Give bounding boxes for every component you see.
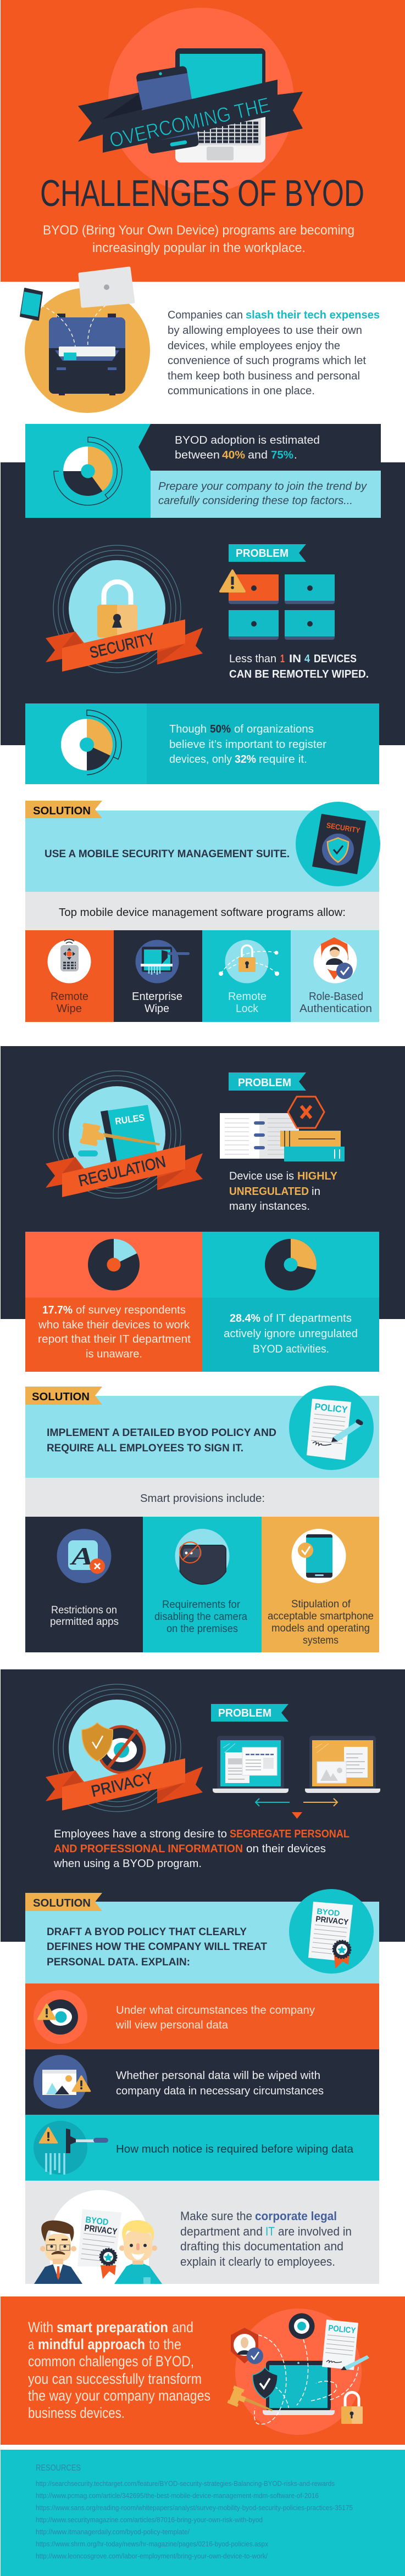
icon: eye warning	[34, 1990, 87, 2044]
icon: shield	[82, 1723, 113, 1761]
solution tag	[25, 1893, 102, 1911]
icon: shield	[253, 2367, 278, 2399]
survey text: report that their IT department	[38, 1333, 191, 1345]
conclusion text: business devices.	[28, 2405, 125, 2421]
feature: remote wipe	[25, 930, 114, 1022]
text block: segregate: SEGREGATE PERSONAL	[230, 1828, 349, 1840]
icon: personal laptop	[305, 1736, 380, 1793]
provision: permitted apps	[25, 1517, 143, 1652]
solution tag: SOLUTION	[33, 805, 91, 817]
IT department text	[224, 1312, 358, 1355]
text: legal and IT	[180, 2209, 352, 2268]
header circle	[108, 8, 294, 193]
text block: segregate: Employees have a strong desire to	[54, 1828, 227, 1840]
row text: will view personal data	[115, 2019, 229, 2031]
solution tag	[25, 1387, 102, 1405]
survey text: of survey respondents	[76, 1304, 186, 1316]
feature: role-based authentication: Authentication	[299, 1003, 372, 1015]
icon: security book: SECURITY	[326, 821, 360, 835]
panel: smart provisions	[25, 1478, 379, 1652]
conclusion text: and	[172, 2319, 193, 2335]
row text	[116, 2069, 324, 2097]
icon: padlock	[97, 582, 137, 638]
text block: segregate: AND PROFESSIONAL INFORMATION	[54, 1842, 243, 1855]
illustration: BYOD challenges converge on laptop	[227, 2309, 369, 2435]
text block: remote wipe problem: CAN BE REMOTELY WIPED.	[229, 668, 369, 680]
resources links: https://www.sans.org/reading-room/whitepapers/analyst/survey-mobility-byod-security-policies-practices-35175	[36, 2504, 353, 2512]
icon: device grid	[220, 571, 335, 640]
icon: squeegee warning	[34, 2121, 108, 2175]
IT department text: of IT departments	[263, 1312, 352, 1325]
feature: remote wipe: Wipe	[57, 1003, 82, 1015]
IT department text: 28.4%	[230, 1312, 260, 1325]
prompt text: carefully considering these top factors...	[158, 495, 353, 507]
solution tag	[25, 801, 102, 818]
provisions heading: Smart provisions include:	[140, 1493, 265, 1505]
illustration: two employees with policy: BYOD	[85, 2215, 109, 2227]
icon: policy: POLICY	[328, 2323, 356, 2335]
registration text: require it.	[259, 753, 307, 765]
feature: enterprise wipe: Enterprise	[132, 991, 182, 1003]
resources heading: RESOURCES	[36, 2463, 81, 2473]
icon: privacy certificate: BYOD	[317, 1907, 340, 1918]
icon: user hexagon	[231, 2328, 263, 2364]
feature: enterprise wipe	[114, 930, 202, 1022]
provision: smartphone models: acceptable smartphone	[268, 1611, 374, 1622]
chart: 28.4 percent pie	[265, 1239, 317, 1290]
feature: enterprise wipe: Wipe	[145, 1003, 169, 1015]
provision: smartphone models: Stipulation of	[291, 1599, 351, 1610]
feature: remote wipe: Remote	[51, 991, 88, 1003]
text block: unregulated: UNREGULATED	[229, 1185, 309, 1198]
icon: image warning	[34, 2055, 90, 2109]
panel: privacy section background	[1, 1669, 405, 1942]
text block: remote wipe problem: DEVICES	[314, 652, 357, 665]
feature: role-based authentication: Role-Based	[309, 991, 363, 1003]
resources links: http://searchsecurity.techtarget.com/feature/BYOD-security-strategies-Balancing-BYOD-risks-and-rewards	[36, 2480, 335, 2488]
panel: device registration stat	[25, 703, 379, 784]
registration text	[169, 723, 326, 765]
person: employee	[114, 2220, 162, 2284]
icon: eye	[289, 2313, 314, 2339]
row: wipe personal data	[25, 2049, 379, 2115]
row: view personal data	[25, 1983, 379, 2049]
solution text: DRAFT A BYOD POLICY THAT CLEARLY	[47, 1926, 247, 1938]
title ribbon	[103, 80, 278, 153]
conclusion text: smart preparation	[57, 2319, 168, 2335]
adoption text	[175, 434, 320, 461]
solution text: USE A MOBILE SECURITY MANAGEMENT SUITE.	[45, 848, 290, 860]
provision: camera disabling	[143, 1517, 262, 1652]
resources links: https://www.shrm.org/hr-today/news/hr-magazine/pages/0216-byod-policies.aspx	[36, 2540, 269, 2548]
text block: tech expenses: communications in one place.	[168, 384, 315, 397]
icon: security book	[296, 802, 380, 886]
text block: unregulated: HIGHLY	[297, 1170, 337, 1182]
panel: survey stat	[25, 1232, 202, 1372]
solution text	[47, 1427, 276, 1454]
IT department text: actively ignore unregulated	[224, 1327, 358, 1340]
panel: regulation solution	[25, 1385, 379, 1478]
feature: remote lock: Remote	[228, 991, 267, 1003]
illustration: two employees with policy: PRIVACY	[84, 2223, 118, 2237]
panel: legal and IT	[25, 2181, 379, 2284]
registration text: Though	[169, 723, 207, 735]
header panel	[1, 0, 405, 282]
text block: tech expenses: devices, while employees enjoy the	[168, 339, 340, 352]
resources links: http://www.leoncosgrove.com/labor-employment/bring-your-own-device-to-work/	[36, 2552, 268, 2560]
text block: tech expenses: by allowing employees to use their own	[168, 324, 362, 337]
registration text: 32%	[235, 753, 256, 765]
text block: remote wipe problem: 1	[280, 652, 285, 665]
feature: remote lock: Lock	[236, 1003, 259, 1015]
ribbon tails	[78, 92, 303, 142]
resources links: http://www.pcmag.com/article/342695/the-best-mobile-device-management-mdm-software-of-2016	[36, 2492, 319, 2500]
registration text: of organizations	[234, 723, 314, 735]
text block: remote wipe problem: Less than	[229, 652, 276, 665]
provision: permitted apps: permitted apps	[50, 1616, 119, 1628]
conclusion text: With	[28, 2319, 53, 2335]
icon: gavel	[78, 1122, 160, 1156]
icon: policy	[322, 2320, 369, 2370]
icon: gavel	[227, 2385, 273, 2411]
text: legal and IT: drafting this documentation and	[180, 2239, 343, 2253]
text block: tech expenses: convenience of such programs which let	[168, 354, 366, 367]
privacy badge	[46, 1684, 203, 1812]
icon: binder and books	[220, 1097, 345, 1161]
panel: security section background	[1, 462, 405, 745]
regulation badge	[46, 1071, 203, 1198]
chart: registration donut	[61, 710, 121, 775]
adoption text: BYOD adoption is estimated	[175, 434, 320, 446]
text block: segregate: on their devices	[246, 1842, 326, 1855]
text: legal and IT: explain it clearly to employees.	[180, 2255, 335, 2268]
arrow: left teal	[256, 1798, 290, 1806]
provision: smartphone models: models and operating	[271, 1623, 370, 1634]
intro text: increasingly popular in the workplace.	[92, 241, 306, 255]
solution text	[47, 1926, 267, 1968]
row: notice before wiping	[25, 2115, 379, 2181]
text block: tech expenses: slash their tech expenses	[246, 309, 380, 321]
provision: permitted apps: Restrictions on	[51, 1605, 117, 1616]
text block: unregulated: in	[312, 1185, 320, 1198]
conclusion text	[28, 2319, 210, 2421]
provision: permitted apps: A	[69, 1542, 93, 1570]
chart: 17.7 percent pie	[88, 1239, 140, 1290]
panel: security solution	[25, 801, 380, 892]
text block: tech expenses: Companies can	[168, 309, 243, 321]
feature: remote lock	[202, 930, 291, 1022]
registration text: 50%	[210, 723, 231, 735]
security badge	[46, 545, 203, 673]
icon: privacy certificate: PRIVACY	[315, 1915, 349, 1927]
text block: unregulated: Device use is	[229, 1170, 294, 1182]
panel: resources	[1, 2450, 405, 2576]
problem tag: security	[229, 544, 306, 562]
feature: role-based authentication	[291, 930, 379, 1022]
phone illustration	[136, 65, 199, 154]
text block: remote wipe problem	[229, 652, 369, 680]
intro text: BYOD (Bring Your Own Device) programs are becoming	[43, 223, 354, 238]
registration text: believe it’s important to register	[169, 738, 326, 751]
ribbon label: security: SECURITY	[88, 630, 156, 662]
intro text	[43, 223, 354, 255]
conclusion text: to the	[149, 2336, 181, 2353]
mdm heading: Top mobile device management software programs allow:	[59, 907, 346, 919]
problem tag: privacy	[211, 1704, 289, 1722]
conclusion text: you can successfully transform	[28, 2371, 202, 2387]
provision: smartphone models: systems	[303, 1635, 339, 1646]
icon: privacy certificate	[289, 1889, 374, 1974]
resources links	[36, 2480, 353, 2560]
text block: unregulated	[229, 1170, 337, 1212]
arrow: down triangle	[292, 1812, 302, 1819]
adoption text: .	[294, 449, 297, 461]
person: manager	[34, 2221, 82, 2284]
provision: smartphone models	[262, 1517, 379, 1652]
adoption text: and	[248, 449, 268, 461]
panel: conclusion	[1, 2296, 405, 2445]
provision: camera disabling: Requirements for	[162, 1599, 241, 1611]
text block: unregulated: many instances.	[229, 1200, 310, 1212]
icon: briefcase with devices	[20, 268, 150, 413]
registration text: devices, only	[169, 753, 232, 765]
resources links: http://www.securitymagazine.com/articles/87016-bring-your-own-risk-with-byod	[36, 2516, 263, 2524]
text: legal and IT: are involved in	[278, 2225, 352, 2238]
row text: Under what circumstances the company	[116, 2004, 315, 2016]
IT department text: BYOD activities.	[253, 1343, 329, 1355]
provision: camera disabling: on the premises	[167, 1623, 238, 1635]
resources links: http://www.itmanagerdaily.com/byod-policy-template/	[36, 2528, 190, 2536]
solution text: DEFINES HOW THE COMPANY WILL TREAT	[47, 1941, 267, 1953]
icon: signed policy	[289, 1385, 374, 1470]
problem tag: regulation	[229, 1072, 306, 1091]
icon: blocked eye	[98, 1726, 145, 1773]
title line one: OVERCOMING THE	[107, 93, 272, 152]
text: legal and IT: corporate legal	[255, 2209, 337, 2223]
chart: adoption donut	[54, 437, 122, 505]
solution text: IMPLEMENT A DETAILED BYOD POLICY AND	[47, 1427, 276, 1439]
text block: tech expenses	[168, 309, 380, 397]
adoption text: 75%	[271, 449, 293, 461]
panel: regulation section background	[1, 1046, 405, 1319]
row text: Whether personal data will be wiped with	[116, 2069, 320, 2082]
prompt text: Prepare your company to join the trend by	[158, 480, 367, 493]
conclusion text: common challenges of BYOD,	[28, 2353, 194, 2370]
arrow: right gold	[303, 1798, 337, 1806]
text: legal and IT: IT	[265, 2225, 275, 2238]
solution tag: SOLUTION	[33, 1897, 91, 1909]
panel: privacy solution	[25, 1889, 379, 1983]
solution tag: SOLUTION	[32, 1391, 90, 1403]
problem tag: privacy: PROBLEM	[218, 1707, 271, 1719]
survey text: 17.7%	[42, 1304, 73, 1316]
prompt text	[158, 480, 367, 507]
survey text	[38, 1304, 191, 1360]
text block: segregate: when using a BYOD program.	[53, 1857, 202, 1870]
adoption text: 40%	[222, 449, 245, 461]
panel: IT department stat	[202, 1232, 379, 1372]
laptop illustration	[175, 48, 265, 163]
illustration: two employees with policy	[34, 2190, 162, 2284]
provision: camera disabling: disabling the camera	[154, 1611, 247, 1623]
conclusion text: mindful approach	[38, 2336, 145, 2353]
text: legal and IT: department and	[180, 2225, 263, 2238]
conclusion text: a	[28, 2336, 35, 2353]
row text	[115, 2004, 315, 2031]
adoption text: between	[175, 449, 220, 461]
solution text: REQUIRE ALL EMPLOYEES TO SIGN IT.	[47, 1442, 243, 1454]
icon: signed policy: POLICY	[314, 1401, 348, 1415]
text block: remote wipe problem: IN	[289, 652, 301, 665]
survey text: who take their devices to work	[38, 1318, 190, 1331]
text block: segregate	[53, 1828, 349, 1870]
text block: tech expenses: them keep both business and personal	[168, 370, 360, 382]
panel: mobile device management	[25, 892, 379, 1022]
conclusion text: the way your company manages	[28, 2388, 210, 2404]
problem tag: regulation: PROBLEM	[238, 1077, 291, 1089]
text block: remote wipe problem: 4	[304, 652, 310, 665]
row text: How much notice is required before wiping data	[116, 2143, 354, 2155]
survey text: is unaware.	[86, 1348, 142, 1360]
icon: padlock	[341, 2392, 363, 2424]
text: legal and IT: Make sure the	[180, 2209, 252, 2223]
row text: company data in necessary circumstances	[116, 2085, 324, 2097]
icon: rule book	[101, 1105, 158, 1164]
icon: work laptop	[213, 1736, 289, 1793]
icon: rule book: RULES	[114, 1112, 145, 1127]
panel: adoption stat	[25, 424, 381, 518]
problem tag: security: PROBLEM	[236, 547, 289, 560]
ribbon label: regulation: REGULATION	[77, 1153, 168, 1190]
ribbon label: privacy: PRIVACY	[90, 1769, 154, 1801]
laptop	[263, 2361, 335, 2415]
solution text: PERSONAL DATA. EXPLAIN:	[47, 1956, 190, 1968]
